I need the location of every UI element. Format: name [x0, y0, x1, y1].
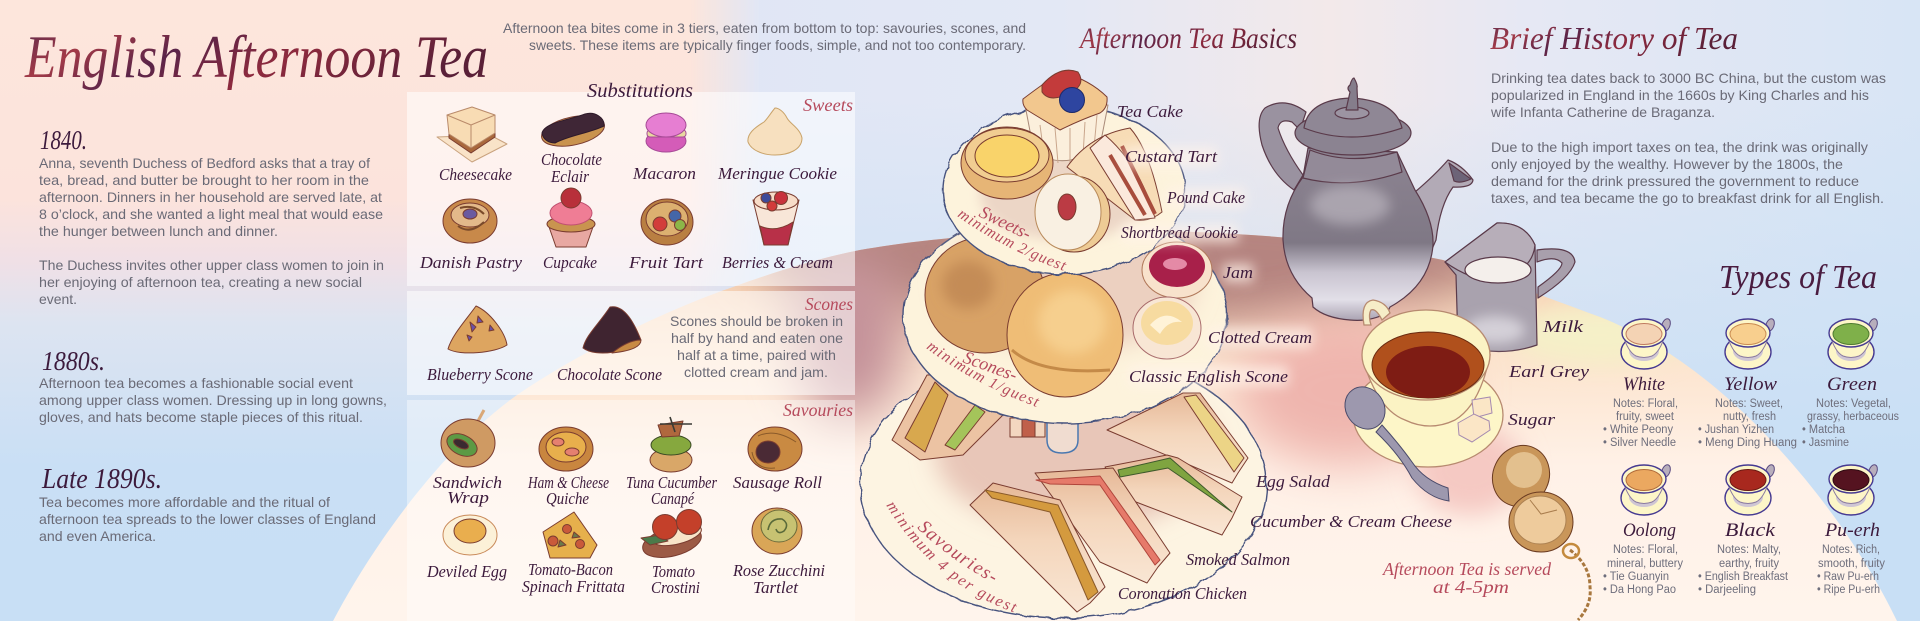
callout: serving time: at 4-5pm [1433, 577, 1509, 597]
food: egg salad sandwich [1107, 393, 1248, 483]
labels: savouries row 1: Tuna Cucumber [626, 473, 717, 492]
labels: tea setting: Sugar [1508, 410, 1555, 429]
labels: savouries row 1: Quiche [546, 489, 589, 508]
tea type: white [1603, 318, 1678, 449]
labels: savouries row 2: Spinach Frittata [522, 577, 625, 596]
icon: berries and cream [753, 192, 799, 245]
icon: teapot [1259, 78, 1473, 320]
labels: sweets items: Meringue Cookie [717, 164, 837, 183]
name: Green [1827, 374, 1877, 395]
food: tea cake [1023, 70, 1108, 163]
icon: yellow tea cup [1725, 318, 1776, 369]
heading: late 1890s: Late 1890s. [41, 463, 162, 495]
labels: tea setting [1508, 317, 1590, 429]
text: late 1890s body [39, 494, 376, 544]
labels: stand items: Pound Cake [1166, 188, 1245, 207]
icon: macaron [646, 113, 686, 152]
notes: Notes: Sweet, [1715, 398, 1783, 410]
tiered stand with food [860, 70, 1266, 618]
notes: • Da Hong Pao [1603, 584, 1676, 596]
text: 1880s body [39, 375, 387, 425]
labels: stand items: Tea Cake [1117, 102, 1183, 121]
tier labels: sweets: minimum 2/guest [957, 210, 1066, 270]
labels: sweets items: Eclair [550, 167, 589, 186]
food: jam [1142, 242, 1212, 298]
timeline: 1880s [39, 346, 387, 425]
heading: afternoon tea basics: Afternoon Tea Basics [1078, 22, 1297, 55]
notes: • Jushan Yizhen [1698, 424, 1774, 436]
spoon [1337, 379, 1449, 501]
labels: scones items: Blueberry Scone [427, 365, 533, 384]
callout: serving time: Afternoon Tea is served [1382, 559, 1552, 579]
icon: sausage roll [748, 427, 802, 471]
tea type: black [1698, 464, 1789, 596]
text: scones etiquette: half by hand and eaten one [671, 330, 843, 346]
notes: • Matcha [1802, 424, 1846, 436]
text: late 1890s body: and even America. [39, 528, 156, 544]
notes [1802, 398, 1899, 449]
labels: savouries row 1: Ham & Cheese [527, 473, 609, 492]
labels: sweets items: Chocolate [541, 150, 602, 169]
labels: savouries row 2: Tartlet [753, 578, 799, 597]
text: 1840 body: her enjoying of afternoon tea, creating a new social [39, 274, 362, 290]
text: history: only enjoyed by the wealthy. However by the 1800s, the [1491, 156, 1843, 172]
food: smoked salmon sandwich [1035, 468, 1170, 583]
food: shortbread cookie [1035, 174, 1110, 252]
food: clotted cream [1133, 297, 1201, 359]
text: tiers intro: Afternoon tea bites come in 3 tiers, eaten from bottom to top: savouries, scones, and [503, 20, 1026, 36]
labels: stand items [1117, 102, 1452, 603]
food: cucumber and cream cheese sandwich [1105, 455, 1242, 535]
name: White [1623, 374, 1665, 395]
icon: cheesecake [437, 107, 507, 162]
timeline: late 1890s [39, 463, 376, 544]
icon: danish pastry [443, 199, 497, 243]
icon: black tea cup [1725, 464, 1776, 515]
timeline: 1840 [39, 125, 384, 307]
labels: sweets items: Fruit Tart [628, 253, 704, 272]
labels: savouries row 2: Deviled Egg [426, 562, 507, 581]
text: history: Due to the high import taxes on tea, the drink was originally [1491, 139, 1868, 155]
panel: sweets substitutions [407, 92, 855, 286]
heading: brief history of tea: Brief History of Tea [1490, 20, 1738, 56]
labels: savouries row 2 [426, 560, 825, 597]
icon: green tea cup [1828, 318, 1879, 369]
icon: tomato bacon spinach frittata [543, 512, 597, 558]
icon: fruit tart [641, 199, 693, 245]
text: 1840 body: afternoon. Dinners in her household are served late, at [39, 189, 382, 205]
text: 1880s body: among upper class women. Dressing up in long gowns, [39, 392, 387, 408]
tea type: oolong [1603, 464, 1683, 596]
tea type: green [1802, 318, 1899, 449]
text: late 1890s body: Tea becomes more affordable and the ritual of [39, 494, 330, 510]
text: 1840 body: 8 o’clock, and she wanted a light meal that would ease [39, 206, 383, 222]
notes: mineral, buttery [1607, 558, 1683, 570]
icon: tuna cucumber canape [650, 417, 692, 472]
text: scones etiquette: Scones should be broken in [670, 313, 843, 329]
labels: savouries row 1: Sandwich [433, 473, 502, 492]
text: 1840 body [39, 155, 384, 307]
notes: fruity, sweet [1616, 411, 1675, 423]
text: 1840 body: Anna, seventh Duchess of Bedford asks that a tray of [39, 155, 370, 171]
labels: sweets items: Macaron [632, 164, 696, 183]
icon: pu-erh tea cup [1828, 464, 1879, 515]
labels: sweets items: Berries & Cream [722, 253, 833, 272]
labels: stand items: Egg Salad [1255, 472, 1331, 491]
icon: tomato crostini [640, 510, 704, 563]
labels: scones items [427, 365, 662, 384]
notes: Notes: Floral, [1613, 544, 1678, 556]
text: scones etiquette: clotted cream and jam. [684, 364, 828, 380]
labels: scones items: Chocolate Scone [557, 365, 662, 384]
food: coronation chicken sandwich [970, 483, 1105, 612]
tier labels: scones: Scones- [962, 352, 1016, 378]
icon: pocket watch [1483, 436, 1590, 620]
text: 1840 body: tea, bread, and butter be brought to her room in the [39, 172, 369, 188]
icon: meringue cookie [748, 108, 802, 155]
notes: • Jasmine [1802, 437, 1849, 449]
label: sweets: Sweets [803, 95, 853, 115]
notes: Notes: Floral, [1613, 398, 1678, 410]
notes: • Raw Pu-erh [1817, 571, 1879, 583]
text: scones etiquette: half at a time, paired with [677, 347, 836, 363]
labels: stand items: Smoked Salmon [1186, 550, 1290, 569]
food: back sandwiches [892, 375, 1045, 460]
tier labels: scones: minimum 1/guest [926, 342, 1040, 406]
text: tiers intro [503, 20, 1026, 53]
notes: • White Peony [1603, 424, 1673, 436]
labels: savouries row 2: Tomato-Bacon [528, 560, 613, 579]
icon: cupcake [547, 188, 595, 247]
icon: oolong tea cup [1621, 464, 1672, 515]
text: 1880s body: Afternoon tea becomes a fashionable social event [39, 375, 353, 391]
notes [1603, 398, 1678, 449]
heading: 1880s: 1880s. [42, 346, 105, 376]
labels: sweets items: Cheesecake [439, 165, 512, 184]
text: 1880s body: gloves, and hats become staple pieces of this ritual. [39, 409, 363, 425]
labels: stand items: Shortbread Cookie [1121, 223, 1238, 242]
icon: chocolate eclair [539, 111, 607, 151]
text: history: demand for the drink pressured the government to reduce [1491, 173, 1859, 189]
labels: savouries row 2: Tomato [652, 562, 695, 581]
text: history [1490, 70, 1886, 206]
labels: sweets items: Cupcake [543, 253, 597, 272]
notes [1698, 398, 1797, 449]
notes: • Meng Ding Huang [1698, 437, 1797, 449]
text: tiers intro: sweets. These items are typically finger foods, simple, and not too contemporary. [529, 37, 1026, 53]
text: 1840 body: event. [39, 291, 77, 307]
food: custard tart [961, 127, 1053, 199]
saucer [1353, 363, 1503, 467]
name: Oolong [1623, 520, 1676, 541]
labels: stand items: Custard Tart [1125, 147, 1218, 166]
notes: Notes: Vegetal, [1816, 398, 1891, 410]
tea [1372, 332, 1484, 398]
labels: savouries row 1: Wrap [447, 488, 489, 507]
icon: chocolate scone [583, 307, 641, 353]
icon: white tea cup [1621, 318, 1672, 369]
cup body [1363, 355, 1490, 426]
heading: 1840: 1840. [40, 125, 87, 155]
tier labels: savouries: minimum 4 per guest [886, 502, 1017, 612]
sugar cubes [1458, 397, 1492, 442]
name: Black [1725, 520, 1776, 541]
notes: • Tie Guanyin [1603, 571, 1669, 583]
icon: deviled egg [443, 515, 497, 555]
tier labels: sweets: Sweets- [978, 207, 1029, 236]
label: scones: Scones [805, 294, 853, 314]
labels: stand items: Clotted Cream [1208, 328, 1312, 347]
tier labels: savouries: Savouries- [918, 522, 996, 580]
name: Yellow [1724, 374, 1777, 395]
labels: stand items: Coronation Chicken [1118, 584, 1247, 603]
stand: centre rod [1047, 418, 1078, 453]
stand: bottom plate [860, 350, 1266, 618]
labels: sweets items [419, 150, 837, 272]
notes: • Ripe Pu-erh [1817, 584, 1880, 596]
panel: savouries substitutions [407, 400, 855, 621]
text: history: popularized in England in the 1660s by King Charles and his [1491, 87, 1869, 103]
icon: milk jug [1445, 223, 1575, 352]
stand: middle plate [903, 207, 1227, 423]
notes: Notes: Malty, [1717, 544, 1781, 556]
tea type: yellow [1698, 318, 1797, 449]
notes: nutty, fresh [1723, 411, 1776, 423]
notes [1603, 544, 1683, 596]
labels: stand items: Cucumber & Cream Cheese [1250, 512, 1452, 531]
notes: • English Breakfast [1698, 571, 1789, 583]
tea type: pu-erh [1817, 464, 1885, 596]
icon: teacup of earl grey with saucer [1337, 300, 1503, 501]
text: history: taxes, and tea became the go to breakfast drink for all English. [1491, 190, 1884, 206]
labels: stand items: Jam [1223, 263, 1253, 282]
notes: Notes: Rich, [1822, 544, 1880, 556]
notes [1817, 544, 1885, 596]
labels: stand items: Classic English Scone [1129, 367, 1288, 386]
text: 1840 body: The Duchess invites other upper class women to join in [39, 257, 384, 273]
food: classic english scone [1007, 273, 1123, 397]
text: 1840 body: the hunger between lunch and dinner. [39, 223, 278, 239]
text: scones etiquette [670, 313, 843, 380]
callout: serving time [1382, 559, 1552, 597]
cup handle [1363, 300, 1390, 325]
soft halos behind stand labels [1121, 147, 1312, 386]
icon: sandwich wrap [441, 410, 495, 467]
icon: rose zucchini tartlet [752, 508, 802, 554]
notes: earthy, fruity [1719, 558, 1779, 570]
labels: sweets items: Danish Pastry [419, 253, 522, 272]
notes: • Silver Needle [1603, 437, 1676, 449]
icon: ham and cheese quiche [539, 427, 593, 471]
heading: types of tea: Types of Tea [1719, 259, 1877, 296]
food: pound cake [1067, 128, 1162, 220]
notes: • Darjeeling [1698, 584, 1756, 596]
text: history: wife Infanta Catherine de Braganza. [1490, 104, 1715, 120]
notes: smooth, fruity [1818, 558, 1885, 570]
labels: savouries row 1 [433, 473, 822, 508]
text: history: Drinking tea dates back to 3000 BC China, but the custom was [1491, 70, 1886, 86]
icon: blueberry scone [448, 306, 507, 353]
food: scone left [925, 237, 1045, 353]
labels: savouries row 1: Canapé [651, 489, 695, 508]
labels: tea setting: Milk [1542, 317, 1584, 336]
labels: savouries row 1: Sausage Roll [733, 473, 822, 492]
label: savouries: Savouries [783, 400, 853, 420]
text: late 1890s body: afternoon tea spreads to the lower classes of England [39, 511, 376, 527]
labels: savouries row 2: Crostini [651, 578, 700, 597]
panel: scones substitutions [407, 291, 855, 395]
title: English Afternoon Tea [24, 24, 488, 90]
stand: top plate [943, 106, 1185, 274]
notes: grassy, herbaceous [1807, 411, 1899, 423]
labels: savouries row 2: Rose Zucchini [732, 561, 825, 580]
labels: tea setting: Earl Grey [1508, 362, 1590, 381]
name: Pu-erh [1824, 520, 1880, 541]
notes [1698, 544, 1789, 596]
heading: substitutions: Substitutions [587, 80, 693, 102]
